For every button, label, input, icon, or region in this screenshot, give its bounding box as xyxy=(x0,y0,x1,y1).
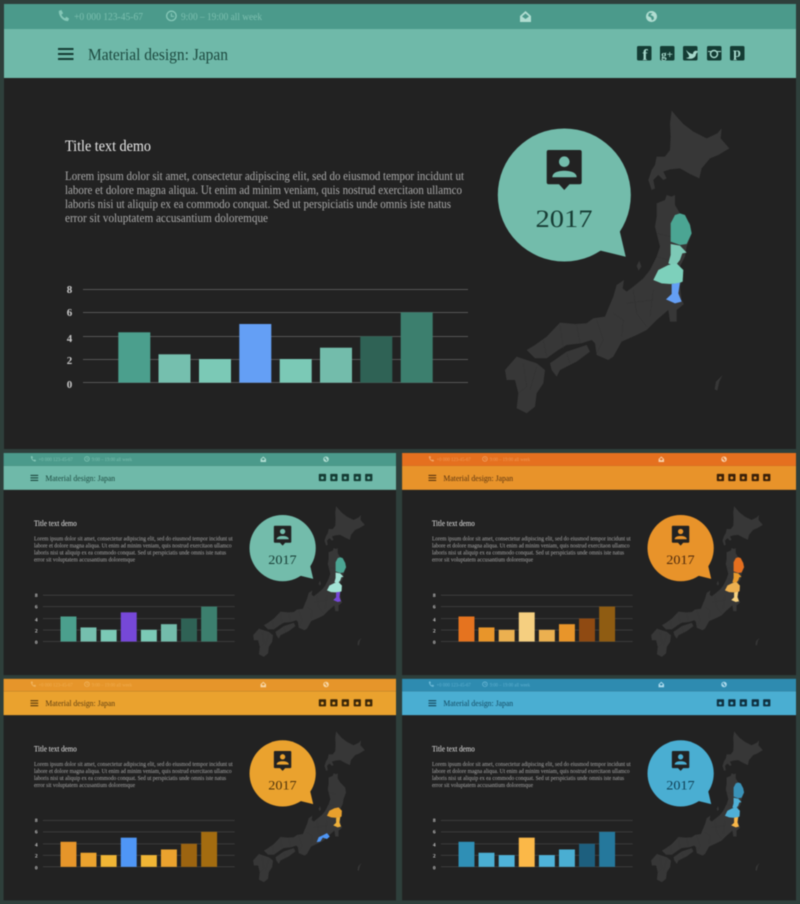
text block: Lorem ipsum dolor sit amet, consectetur adipiscing elit, sed do eiusmod tempor incidunt ut xyxy=(432,536,631,543)
social icons xyxy=(637,46,744,64)
bar chart: 6 xyxy=(35,604,38,610)
header bar xyxy=(4,466,396,490)
social icons: g+ xyxy=(661,49,673,61)
bar chart: 8 xyxy=(35,818,38,824)
text block: Lorem ipsum dolor sit amet, consectetur adipiscing elit, sed do eiusmod tempor incidunt ut xyxy=(65,168,464,183)
bar chart: 4 xyxy=(433,843,436,849)
top contact bar: 9:00 – 19:00 all week xyxy=(181,12,263,23)
text block: Title text demo xyxy=(34,744,77,753)
bar chart: 4 xyxy=(67,333,73,345)
bar chart: 6 xyxy=(67,307,73,319)
bar chart: 8 xyxy=(35,593,38,599)
text block: error sit voluptatem accusantium doloremque xyxy=(65,210,268,225)
text block: Lorem ipsum dolor sit amet, consectetur adipiscing elit, sed do eiusmod tempor incidunt ut xyxy=(34,536,233,543)
panel: main teal slide xyxy=(4,4,796,449)
year speech bubble: 2017 xyxy=(666,778,695,792)
bar chart: 8 xyxy=(433,593,436,599)
text block: labore et dolore magna aliqua. Ut enim ad minim veniam, quis nostrud exercitaon ullamco xyxy=(65,182,462,197)
text block xyxy=(432,744,631,789)
bar chart: 0 xyxy=(433,866,436,872)
bar chart: 2 xyxy=(35,854,38,860)
header bar xyxy=(402,691,796,715)
text block: laboris nisi ut aliquip ex ea commodo conquat. Sed ut perspiciatis unde omnis iste natus xyxy=(432,550,625,557)
text block: labore et dolore magna aliqua. Ut enim ad minim veniam, quis nostrud exercitaon ullamco xyxy=(34,768,232,775)
text block xyxy=(432,519,631,564)
text block: error sit voluptatem accusantium doloremque xyxy=(34,557,135,564)
header bar: Material design: Japan xyxy=(45,473,116,483)
bar chart xyxy=(67,284,468,391)
text block: laboris nisi ut aliquip ex ea commodo conquat. Sed ut perspiciatis unde omnis iste natus xyxy=(34,775,227,782)
panel: small blue slide xyxy=(402,679,796,900)
top contact bar xyxy=(4,679,396,691)
top contact bar: 9:00 – 19:00 all week xyxy=(490,682,530,688)
text block: laboris nisi ut aliquip ex ea commodo conquat. Sed ut perspiciatis unde omnis iste natus xyxy=(432,775,625,782)
text block: error sit voluptatem accusantium doloremque xyxy=(34,782,135,789)
top contact bar xyxy=(402,453,796,466)
text block xyxy=(65,138,464,225)
header bar: Material design: Japan xyxy=(443,698,514,708)
bar chart: 4 xyxy=(35,843,38,849)
year speech bubble xyxy=(250,740,316,807)
top contact bar: 9:00 – 19:00 all week xyxy=(490,457,530,463)
bar chart: 2 xyxy=(67,355,73,367)
year speech bubble xyxy=(498,128,631,262)
bar chart: 8 xyxy=(67,284,73,296)
text block: Title text demo xyxy=(34,519,77,528)
bar chart: 6 xyxy=(35,830,38,836)
panel: small orange slide xyxy=(402,453,796,675)
year speech bubble: 2017 xyxy=(268,553,297,567)
bar chart xyxy=(433,593,633,646)
text block: laboris nisi ut aliquip ex ea commodo conquat. Sed ut perspiciatis unde omnis iste natus xyxy=(65,196,451,211)
top contact bar: 9:00 – 19:00 all week xyxy=(92,682,132,688)
text block: labore et dolore magna aliqua. Ut enim ad minim veniam, quis nostrud exercitaon ullamco xyxy=(432,543,630,550)
panel: small amber slide xyxy=(4,679,396,900)
panel: small teal slide xyxy=(4,453,396,675)
text block: labore et dolore magna aliqua. Ut enim ad minim veniam, quis nostrud exercitaon ullamco xyxy=(34,543,232,550)
header bar: Material design: Japan xyxy=(443,473,514,483)
header bar xyxy=(402,466,796,490)
year speech bubble xyxy=(250,515,316,581)
top contact bar: +0 000 123-45-67 xyxy=(38,457,73,463)
top contact bar: +0 000 123-45-67 xyxy=(436,682,471,688)
map of Japan xyxy=(253,506,365,657)
map of Japan xyxy=(253,731,365,882)
bar chart: 4 xyxy=(433,617,436,623)
map of Japan xyxy=(651,731,763,882)
top contact bar xyxy=(4,453,396,466)
header bar xyxy=(4,691,396,715)
bar chart: 0 xyxy=(35,866,38,872)
year speech bubble xyxy=(648,515,714,581)
header bar: Material design: Japan xyxy=(88,45,228,64)
year speech bubble: 2017 xyxy=(268,778,297,792)
text block: Title text demo xyxy=(432,519,475,528)
text block: error sit voluptatem accusantium doloremque xyxy=(432,557,533,564)
year speech bubble: 2017 xyxy=(666,553,695,567)
text block xyxy=(34,744,233,789)
text block: Title text demo xyxy=(65,138,151,155)
bar chart: 2 xyxy=(35,628,38,634)
map of Japan xyxy=(651,506,763,657)
text block: labore et dolore magna aliqua. Ut enim ad minim veniam, quis nostrud exercitaon ullamco xyxy=(432,768,630,775)
bar chart: 8 xyxy=(433,818,436,824)
header bar: Material design: Japan xyxy=(45,698,116,708)
social icons xyxy=(717,699,770,706)
top contact bar: +0 000 123-45-67 xyxy=(38,682,73,688)
top contact bar: 9:00 – 19:00 all week xyxy=(92,457,132,463)
bar chart: 2 xyxy=(433,854,436,860)
text block: Title text demo xyxy=(432,744,475,753)
bar chart: 0 xyxy=(433,640,436,646)
bar chart: 4 xyxy=(35,617,38,623)
bar chart xyxy=(35,593,235,646)
social icons xyxy=(717,474,770,481)
text block: laboris nisi ut aliquip ex ea commodo conquat. Sed ut perspiciatis unde omnis iste natus xyxy=(34,550,227,557)
top contact bar: +0 000 123-45-67 xyxy=(436,457,471,463)
text block: error sit voluptatem accusantium doloremque xyxy=(432,782,533,789)
bar chart: 0 xyxy=(35,640,38,646)
header bar xyxy=(4,29,796,78)
bar chart: 0 xyxy=(67,379,73,391)
text block xyxy=(34,519,233,564)
social icons xyxy=(319,699,372,706)
year speech bubble xyxy=(648,740,714,807)
bar chart xyxy=(433,818,633,872)
bar chart: 2 xyxy=(433,628,436,634)
top contact bar xyxy=(402,679,796,691)
year speech bubble: 2017 xyxy=(536,206,592,233)
text block: Lorem ipsum dolor sit amet, consectetur adipiscing elit, sed do eiusmod tempor incidunt ut xyxy=(34,761,233,768)
social icons xyxy=(319,474,372,481)
bar chart xyxy=(35,818,235,872)
text block: Lorem ipsum dolor sit amet, consectetur adipiscing elit, sed do eiusmod tempor incidunt ut xyxy=(432,761,631,768)
social icons: p xyxy=(733,46,741,61)
social icons: f xyxy=(642,47,648,64)
map of Japan xyxy=(505,111,729,413)
bar chart: 6 xyxy=(433,830,436,836)
top contact bar xyxy=(4,4,796,29)
top contact bar: +0 000 123-45-67 xyxy=(74,12,143,23)
bar chart: 6 xyxy=(433,604,436,610)
